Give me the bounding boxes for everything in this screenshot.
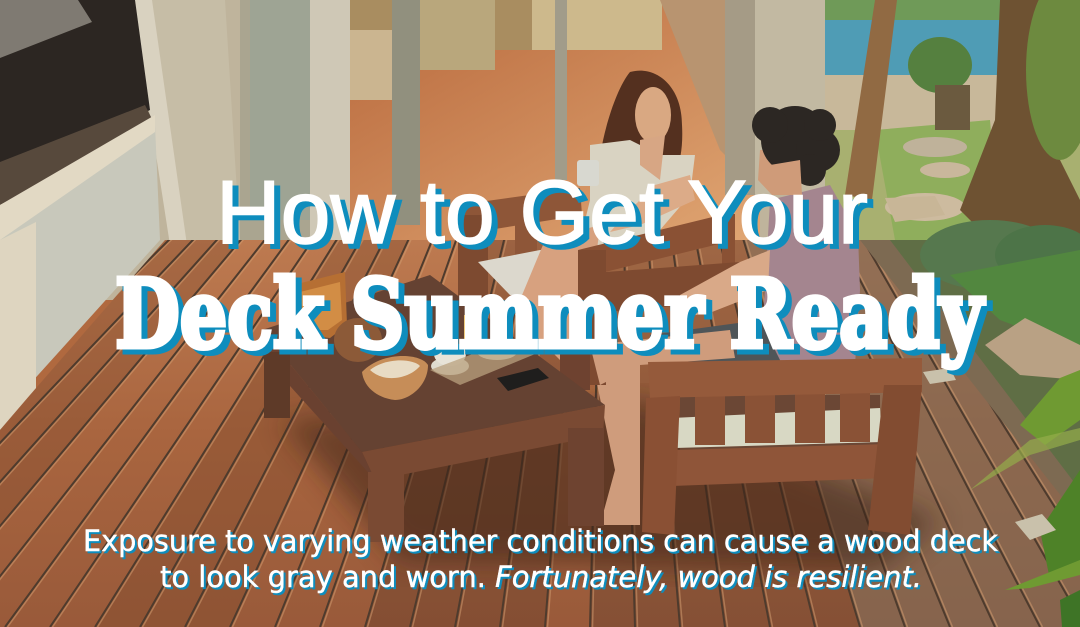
bowl bbox=[334, 318, 382, 362]
man leg and foot bbox=[590, 350, 640, 525]
interior floor bbox=[340, 0, 760, 240]
shadow under table and chairs bbox=[280, 400, 940, 570]
placemat bbox=[430, 340, 540, 385]
deck light fixture bbox=[1015, 514, 1056, 540]
subtitle line 1: Exposure to varying weather conditions can cause a wood deck bbox=[83, 524, 998, 558]
woven tray bbox=[293, 272, 347, 338]
posts bbox=[642, 396, 680, 535]
curly hair bbox=[752, 106, 840, 186]
juice glass bbox=[464, 315, 478, 349]
cushion bbox=[672, 408, 882, 448]
lower rail bbox=[672, 444, 888, 486]
wall and house backdrop bbox=[0, 0, 1080, 300]
deck boards bbox=[0, 240, 1080, 627]
face bbox=[758, 150, 800, 195]
shirt bbox=[575, 140, 695, 262]
torso shirt bbox=[760, 185, 860, 365]
deck light fixture bbox=[923, 368, 956, 384]
board colour variation bbox=[0, 240, 239, 524]
pillars bbox=[132, 0, 897, 245]
sliding glass doors bbox=[240, 0, 750, 240]
interior back wall bbox=[340, 0, 555, 50]
jeans bbox=[650, 320, 800, 415]
phone bbox=[497, 368, 549, 391]
top rail bbox=[648, 358, 922, 398]
coffee cup bbox=[577, 160, 599, 186]
front chair bbox=[642, 358, 922, 535]
legs bbox=[515, 225, 600, 380]
rear chair bbox=[458, 188, 600, 300]
bread basket bbox=[362, 356, 428, 400]
woman bbox=[515, 71, 695, 380]
arm bbox=[680, 250, 770, 318]
tree trunk bbox=[960, 0, 1080, 240]
interior sofa bbox=[338, 0, 662, 100]
front chair side arm bbox=[560, 212, 740, 390]
subtitle line 2: to look gray and worn. Fortunately, wood is resilient. bbox=[160, 560, 922, 594]
foreground leaves bbox=[970, 370, 1080, 627]
cup and plate bbox=[431, 357, 469, 375]
thigh bbox=[590, 330, 735, 385]
neck and arm bbox=[640, 135, 665, 180]
coffee table bbox=[262, 272, 605, 542]
lower garden bed bbox=[870, 240, 1080, 530]
left barbecue alcove bbox=[0, 0, 165, 430]
title line 1: How to Get Your bbox=[216, 163, 868, 263]
back slats bbox=[695, 392, 870, 445]
ground shrubs bbox=[920, 220, 1060, 290]
man bbox=[590, 106, 860, 415]
hair bbox=[598, 71, 682, 198]
garden and pool bbox=[822, 0, 1080, 530]
face bbox=[635, 87, 671, 143]
